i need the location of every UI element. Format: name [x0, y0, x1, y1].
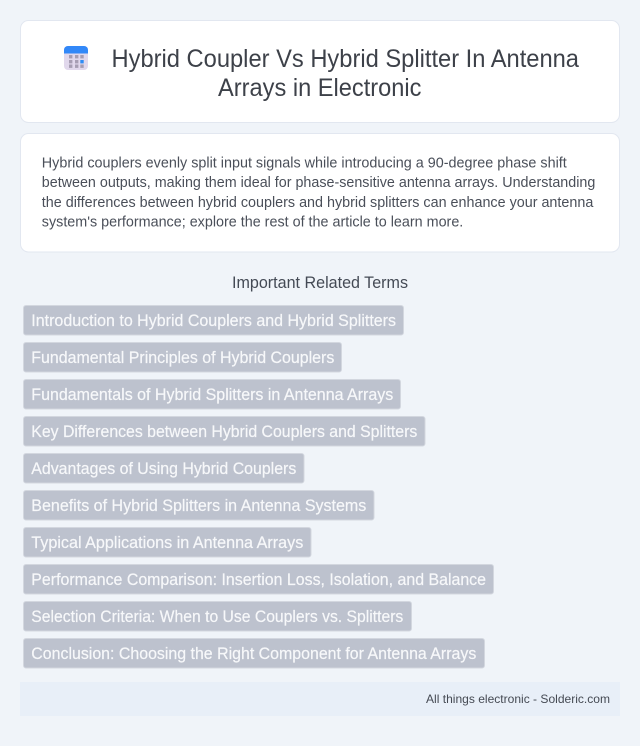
panel: introduction text: between outputs, making them ideal for phase-sensitive antenna arrays. Understanding — [42, 175, 595, 191]
title — [112, 45, 579, 102]
chip: benefits: Benefits of Hybrid Splitters in Antenna Systems — [31, 497, 366, 515]
chip: selection criteria: Selection Criteria: When to Use Couplers vs. Splitters — [31, 608, 403, 626]
chip: conclusion — [24, 638, 484, 668]
chip: advantages — [24, 454, 304, 483]
icon: calendar — [64, 46, 88, 70]
chip: performance comparison — [24, 564, 494, 594]
chip: conclusion: Conclusion: Choosing the Right Component for Antenna Arrays — [31, 645, 476, 663]
chip: key differences — [24, 416, 425, 446]
chip: key differences: Key Differences between Hybrid Couplers and Splitters — [31, 423, 417, 441]
chip: fundamental principles: Fundamental Principles of Hybrid Couplers — [31, 349, 334, 367]
chip: fundamentals of splitters — [24, 380, 400, 409]
footer — [20, 682, 620, 716]
panel: introduction text: the differences between hybrid couplers and hybrid splitters can enhance your antenna — [42, 195, 594, 211]
chip: fundamentals of splitters: Fundamentals of Hybrid Splitters in Antenna Arrays — [31, 386, 393, 404]
chip: benefits — [24, 490, 374, 520]
chip: introduction — [24, 306, 404, 335]
panel: introduction text: Hybrid couplers evenly split input signals while introducing a 90-degree phase shift — [42, 156, 567, 172]
chip: introduction: Introduction to Hybrid Couplers and Hybrid Splitters — [31, 312, 396, 330]
heading: important related terms: Important Related Terms — [232, 274, 408, 292]
chip: selection criteria — [24, 602, 412, 631]
panel: title card — [20, 20, 620, 122]
panel: introduction text — [20, 134, 620, 252]
panel: introduction text: system's performance; explore the rest of the article to learn more. — [42, 214, 463, 230]
chip: typical applications: Typical Applications in Antenna Arrays — [31, 534, 303, 552]
chip: performance comparison: Performance Comparison: Insertion Loss, Isolation, and Balance — [31, 571, 486, 589]
chip: fundamental principles — [24, 342, 342, 372]
chip: typical applications — [24, 528, 311, 557]
chip: advantages: Advantages of Using Hybrid Couplers — [31, 460, 296, 478]
footer: All things electronic - Solderic.com — [426, 692, 610, 706]
title: Hybrid Coupler Vs Hybrid Splitter In Antenna — [112, 45, 579, 73]
title: Arrays in Electronic — [218, 74, 422, 102]
